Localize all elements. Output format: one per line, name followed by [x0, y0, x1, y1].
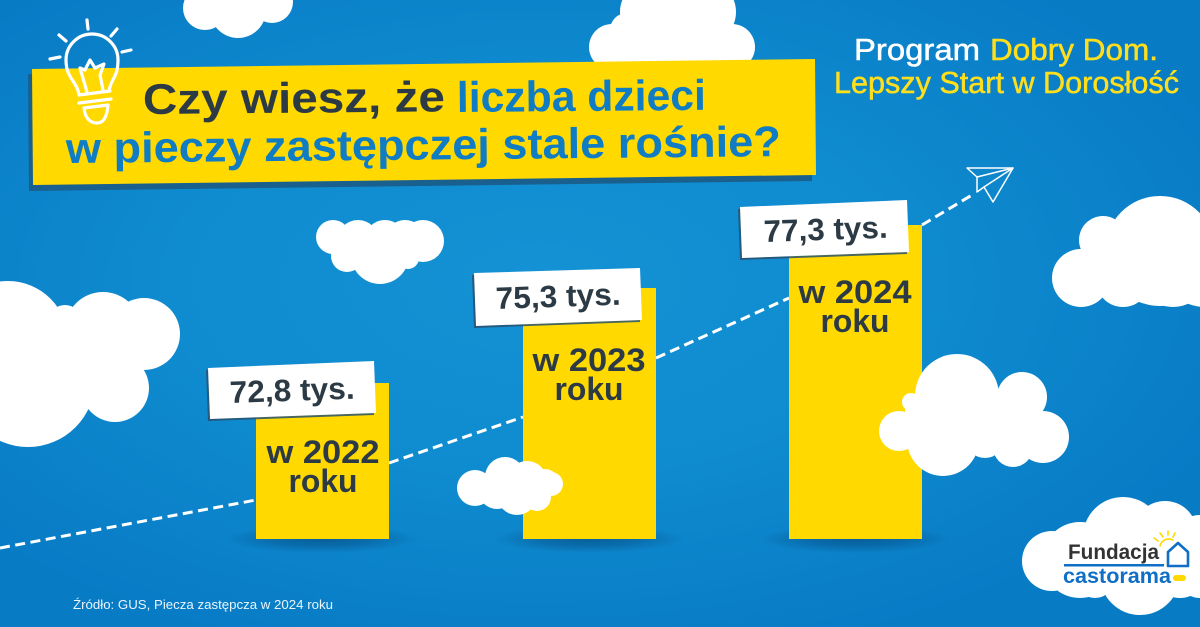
title banner: Czy wiesz, że — [143, 73, 445, 124]
label: 72,8 tys. — [206, 361, 376, 421]
heading: programme name — [834, 32, 1179, 100]
bar: 2023 — [523, 288, 656, 539]
cloud: top left — [183, 0, 293, 38]
bar: 2024: roku — [820, 303, 890, 339]
logo: Fundacja Castorama: castorama — [1063, 564, 1172, 588]
bar: 2024: w 2024 — [797, 274, 912, 310]
cloud: top centre — [589, 0, 755, 72]
label: 77,3 tys.: 77,3 tys. — [763, 210, 888, 249]
cloud: centre — [316, 220, 444, 284]
heading: programme name: Dobry Dom. — [990, 32, 1158, 67]
title banner — [28, 59, 816, 191]
bar: 2022 — [256, 383, 389, 539]
bar: 2022: w 2022 — [265, 434, 380, 470]
label: 75,3 tys. — [472, 268, 642, 328]
label: 75,3 tys.: 75,3 tys. — [495, 277, 621, 316]
cloud: right over 2024 bar — [879, 354, 1069, 476]
cloud: top right — [1052, 196, 1200, 307]
icon: light bulb — [50, 20, 131, 123]
bar: 2023: w 2023 — [531, 342, 646, 378]
logo: Fundacja Castorama: Fundacja — [1068, 540, 1160, 564]
label: 77,3 tys. — [738, 200, 909, 260]
bar: 2022: roku — [288, 463, 358, 499]
label: 72,8 tys.: 72,8 tys. — [229, 371, 355, 410]
bar shadows — [227, 525, 950, 553]
source note: Źródło: GUS, Piecza zastępcza w 2024 roku — [73, 597, 333, 612]
bar: 2023: roku — [554, 371, 624, 407]
title banner: w pieczy zastępczej stale rośnie? — [65, 118, 781, 173]
cloud: left — [0, 281, 180, 447]
logo: Fundacja Castorama — [1022, 497, 1200, 615]
cloud: small over 2023 bar — [457, 457, 563, 515]
heading: programme name: Program — [854, 32, 980, 67]
icon: paper plane — [967, 168, 1013, 202]
chart: dashed growth line — [0, 195, 972, 548]
heading: programme name: Lepszy Start w Dorosłość — [834, 65, 1179, 100]
title banner: liczba dzieci — [457, 72, 706, 122]
bar: 2024 — [789, 225, 922, 539]
